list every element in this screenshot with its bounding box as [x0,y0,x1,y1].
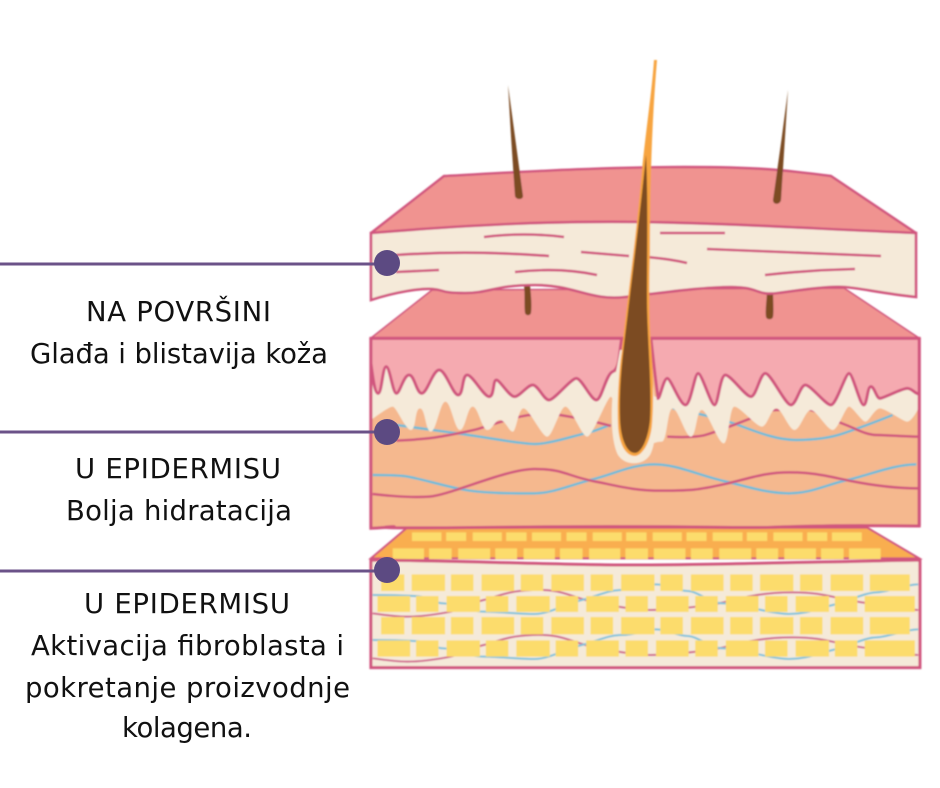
hair follicle halo [612,350,656,463]
hair stubs under the top layer [524,285,773,319]
text: collagen [25,588,350,744]
layer: dermis front [371,338,919,528]
upper blood vessels [396,408,918,444]
epidermis boundary line [371,338,919,405]
hair: right [773,90,788,204]
text: hydration: U EPIDERMISU [75,453,281,485]
text: collagen: kolagena. [122,712,252,744]
callout line: deep layer [0,557,400,583]
epidermis cream ridges [371,363,919,443]
lower blood vessels [373,464,918,497]
text: collagen: U EPIDERMISU [84,588,290,620]
layer: hypodermis fat [371,528,920,668]
text: surface [30,294,328,370]
hair: central shaft [618,60,657,456]
text: collagen: Aktivacija fibroblasta i [31,630,344,662]
skin diagram [371,60,920,668]
layer: epidermis front [371,222,916,300]
callout line: epidermis [0,419,400,445]
text: hydration [66,453,292,527]
hair: left [508,85,523,199]
layer: dermis top face [371,288,919,338]
text: surface: Glađa i blistavija koža [30,338,328,370]
callout line: surface [0,250,400,276]
epidermis pink upper band [371,338,919,405]
text: collagen: pokretanje proizvodnje [25,672,350,704]
layer: epidermis top face [371,167,916,233]
text: surface: NA POVRŠINI [86,294,271,328]
surface fibres [396,233,881,275]
text: hydration: Bolja hidratacija [66,495,292,527]
